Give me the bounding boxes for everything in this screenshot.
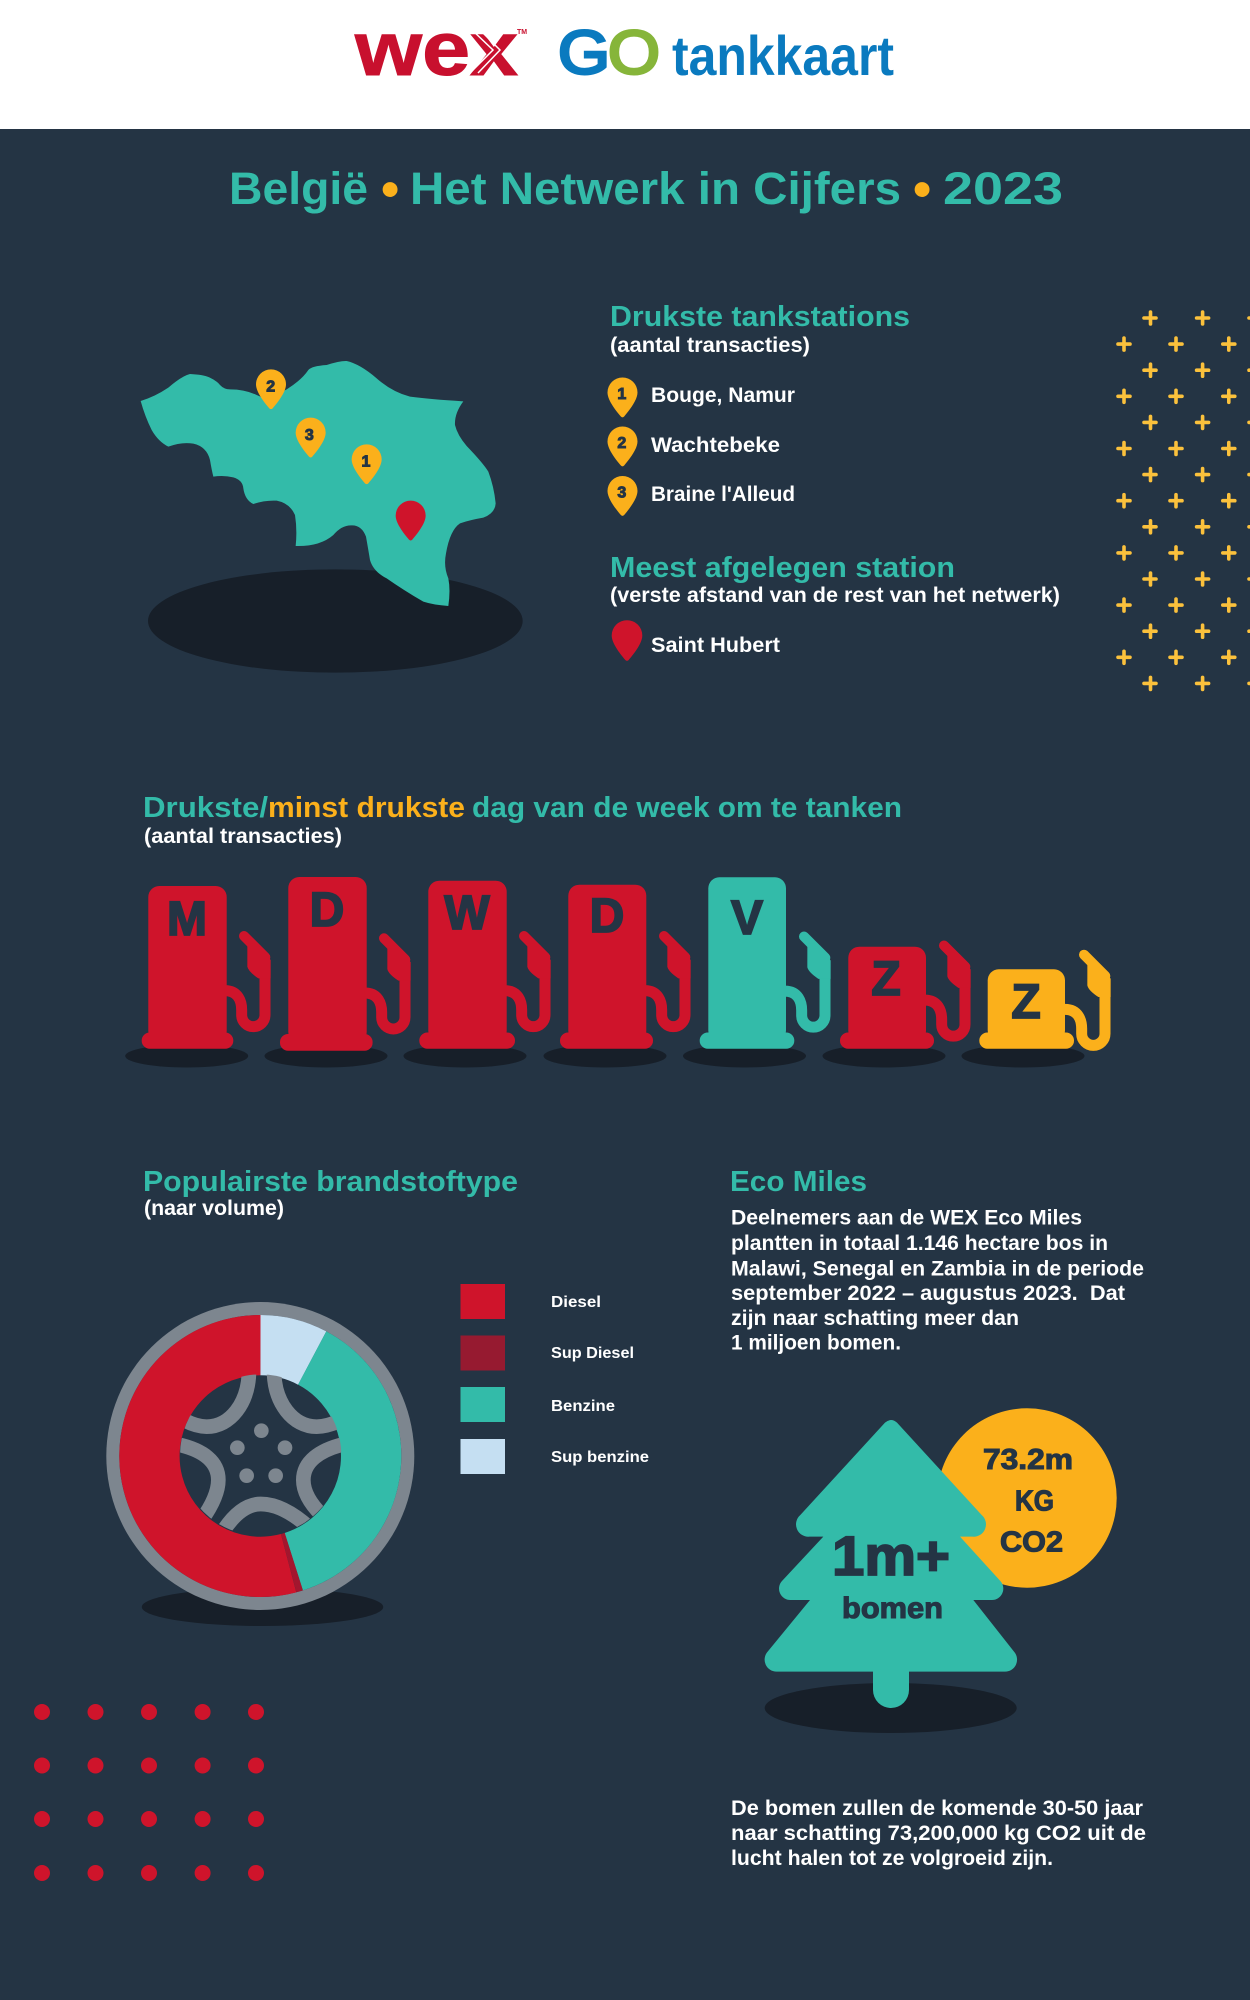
fuel type subheading: (naar volume)	[144, 1197, 284, 1220]
logo: GO tankkaart: tankkaart	[672, 24, 894, 87]
logo: GO tankkaart	[558, 18, 894, 87]
heading: Drukste tankstations	[610, 301, 910, 333]
pump: Maandag	[125, 886, 271, 1068]
logo: WEX: wex	[354, 7, 518, 92]
title: •	[913, 160, 931, 218]
weekday heading: minst drukste	[268, 792, 465, 824]
closing text: naar schatting 73,200,000 kg CO2 uit de	[731, 1822, 1146, 1845]
CO2 circle: 73.2m	[983, 1444, 1073, 1476]
weekday heading: Drukste/	[143, 792, 268, 824]
legend: Sup benzine: Sup benzine	[551, 1449, 649, 1466]
heading: Meest afgelegen station	[610, 552, 955, 584]
tyre donut chart	[106, 1302, 414, 1626]
item 2: 2	[617, 435, 626, 452]
item	[612, 620, 780, 661]
pump: Vrijdag	[683, 877, 831, 1068]
fuel type heading: Populairste brandstoftype	[143, 1166, 518, 1198]
pump: Zaterdag	[822, 945, 971, 1068]
logo: GO tankkaart: G	[558, 18, 610, 86]
closing text	[731, 1797, 1146, 1870]
pump: Maandag: M	[167, 893, 207, 946]
legend: Diesel	[460, 1284, 601, 1319]
title	[229, 160, 1063, 218]
Eco Miles text: september 2022 – augustus 2023. Dat	[731, 1282, 1125, 1305]
weekday subheading: (aantal transacties)	[144, 825, 342, 848]
Eco Miles text: Malawi, Senegal en Zambia in de periode	[731, 1258, 1144, 1280]
legend: Sup benzine	[460, 1439, 649, 1474]
item 1	[608, 378, 795, 417]
pin 2: 2	[266, 379, 275, 396]
pin red	[396, 501, 426, 540]
pump: Zondag: Z	[1011, 976, 1041, 1029]
logo: GO tankkaart: O	[608, 18, 660, 86]
subheading: (verste afstand van de rest van het netwerk)	[610, 584, 1060, 607]
Eco Miles text: plantten in totaal 1.146 hectare bos in	[731, 1232, 1108, 1255]
pump: Woensdag: W	[444, 887, 490, 940]
busiest stations	[608, 301, 910, 516]
legend	[460, 1284, 649, 1474]
legend: Benzine	[460, 1387, 615, 1422]
title: 2023	[943, 163, 1063, 214]
closing text: lucht halen tot ze volgroeid zijn.	[731, 1847, 1053, 1870]
CO2 circle: CO2	[1000, 1527, 1063, 1559]
map of Belgium with pins	[141, 361, 523, 673]
pump: Donderdag: D	[590, 890, 624, 943]
Eco Miles text: Deelnemers aan de WEX Eco Miles	[731, 1206, 1082, 1230]
title: •	[381, 160, 399, 218]
pump: Zondag	[962, 955, 1111, 1068]
Eco Miles heading: Eco Miles	[730, 1166, 867, 1198]
pump: Dinsdag	[264, 877, 411, 1068]
pump: Donderdag	[544, 885, 691, 1068]
weekday heading	[143, 792, 902, 824]
subheading: (aantal transacties)	[610, 334, 810, 357]
Eco Miles text: zijn naar schatting meer dan	[731, 1307, 1019, 1330]
closing text: De bomen zullen de komende 30-50 jaar	[731, 1797, 1143, 1820]
map shape	[141, 361, 496, 606]
Eco Miles text: 1 miljoen bomen.	[731, 1332, 901, 1354]
legend: Benzine: Benzine	[551, 1398, 615, 1415]
legend: Diesel: Diesel	[551, 1294, 601, 1311]
pump: Woensdag	[404, 881, 551, 1068]
pin 1	[352, 444, 382, 484]
item 3	[608, 476, 795, 516]
tree: 1m+	[832, 1524, 950, 1587]
pump: Vrijdag: V	[731, 892, 763, 945]
title: Het Netwerk in Cijfers	[410, 163, 901, 214]
pin 2	[256, 369, 286, 409]
legend: Sup Diesel	[460, 1336, 634, 1370]
item 3: 3	[617, 485, 626, 502]
title: België	[229, 163, 368, 214]
pump: Zaterdag: Z	[871, 953, 901, 1006]
CO2 circle	[937, 1408, 1117, 1588]
item 3: Braine l'Alleud	[651, 483, 795, 506]
pin 3: 3	[305, 427, 314, 444]
item 1: Bouge, Namur	[651, 384, 795, 407]
weekday heading: dag van de week om te tanken	[472, 792, 902, 824]
item 2: Wachtebeke	[651, 434, 780, 457]
CO2 circle: KG	[1015, 1486, 1054, 1518]
tree	[765, 1420, 1017, 1733]
legend: Sup Diesel: Sup Diesel	[551, 1345, 634, 1362]
most remote station	[610, 552, 1060, 661]
pin 3	[296, 418, 326, 457]
tree: bomen	[842, 1592, 943, 1625]
header logos	[0, 0, 1250, 129]
map shadow	[148, 569, 523, 673]
pin 1: 1	[362, 454, 371, 471]
item 2	[608, 427, 780, 466]
fuel pumps chart	[125, 877, 1111, 1068]
item: Saint Hubert	[651, 634, 780, 657]
pump: Dinsdag: D	[310, 884, 344, 937]
logo: WEX: TM	[517, 29, 527, 36]
Eco Miles text	[731, 1206, 1144, 1354]
item 1: 1	[617, 386, 626, 403]
